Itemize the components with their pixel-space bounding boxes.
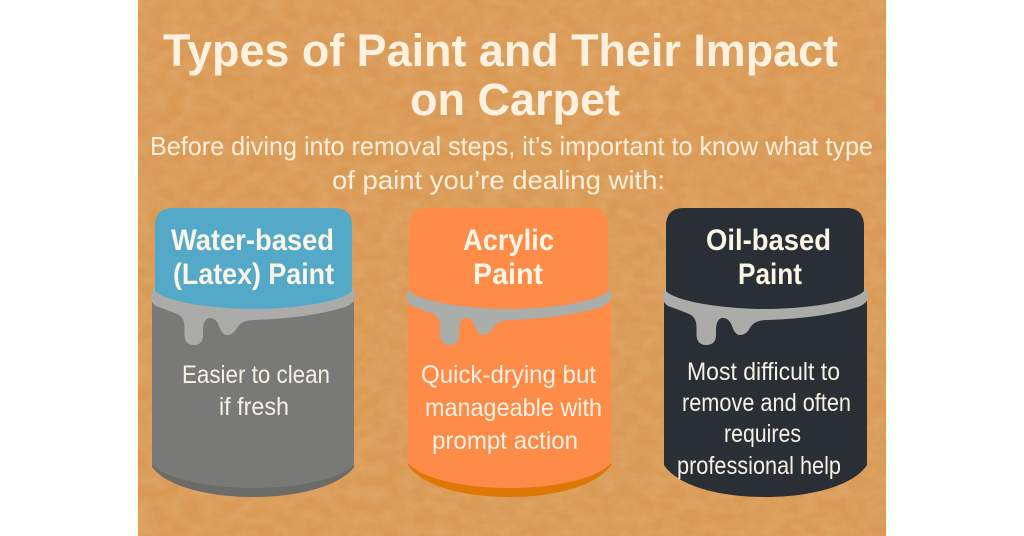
can description: if fresh: [219, 393, 289, 421]
paint rim and drips: [407, 288, 611, 345]
can heading: Acrylic: [463, 224, 554, 257]
paint rim and drips: [663, 288, 868, 345]
can description: manageable with: [425, 394, 602, 422]
can description: [421, 361, 602, 455]
can heading: Oil-based: [706, 224, 831, 257]
title: on Carpet: [410, 74, 620, 125]
can description: Easier to clean: [182, 361, 330, 389]
can description: requires: [724, 420, 801, 448]
can heading: Paint: [738, 258, 802, 291]
label panel: [155, 208, 352, 309]
can description: Most difficult to: [687, 358, 840, 386]
can heading: [171, 224, 334, 291]
label panel: [409, 208, 608, 309]
can heading: Paint: [473, 258, 543, 291]
can description: Quick-drying but: [421, 361, 596, 389]
can heading: [463, 224, 554, 291]
paint can: oil-based: [663, 208, 868, 497]
can description: prompt action: [432, 427, 578, 455]
intro text: Before diving into removal steps, it’s important to know what type: [150, 131, 873, 161]
title: Types of Paint and Their Impact: [163, 25, 838, 76]
can description: [182, 361, 330, 421]
carpet background panel: [138, 0, 886, 536]
intro text: of paint you’re dealing with:: [332, 165, 665, 195]
can heading: [706, 224, 831, 291]
can body: [664, 298, 867, 497]
title: [163, 25, 838, 125]
paint rim and drips: [151, 288, 355, 345]
can heading: (Latex) Paint: [173, 258, 334, 291]
can description: [677, 358, 851, 480]
can description: remove and often: [682, 389, 851, 417]
can heading: Water-based: [171, 224, 334, 257]
paint can: acrylic: [407, 208, 611, 497]
can description: professional help: [677, 452, 841, 480]
intro text: [150, 131, 873, 195]
paint can: water-based: [151, 208, 355, 497]
label panel: [666, 208, 864, 309]
can body: [152, 298, 354, 497]
can body: [408, 298, 611, 497]
